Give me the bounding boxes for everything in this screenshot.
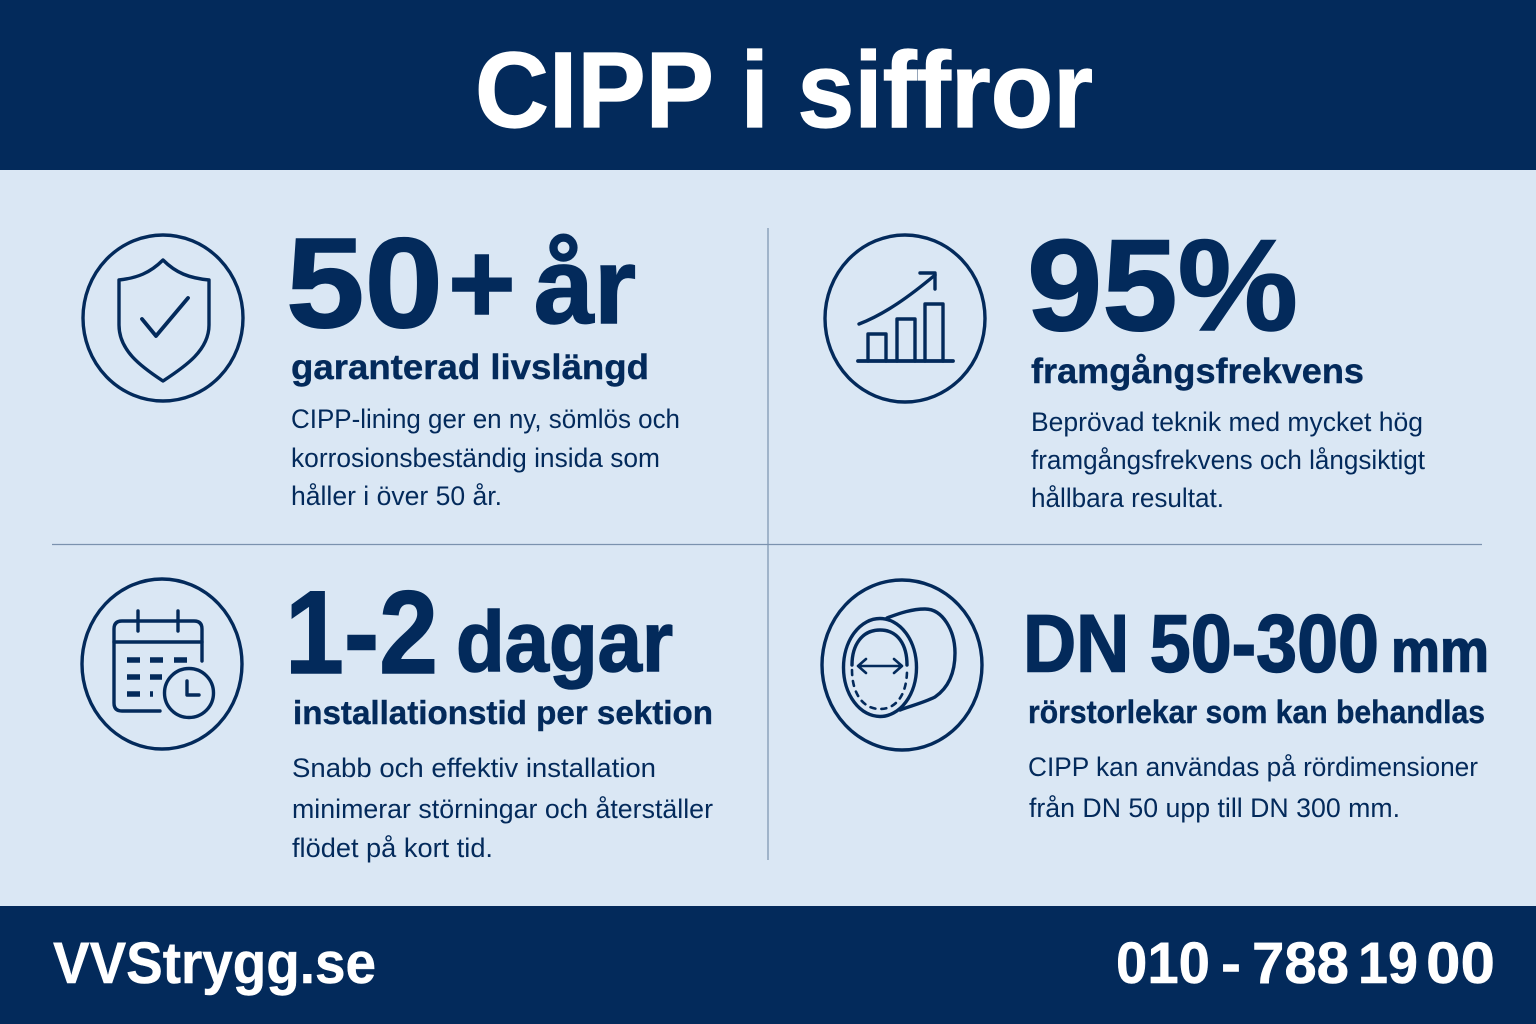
description bbox=[291, 404, 680, 511]
stat: 50+ år: + bbox=[448, 218, 516, 348]
phone number bbox=[1116, 931, 1495, 996]
website: VVStrygg.se bbox=[53, 931, 376, 996]
panel: success rate bbox=[825, 212, 1425, 513]
description: Snabb och effektiv installation bbox=[292, 753, 656, 783]
stat: DN 50-300 mm: DN 50-300 bbox=[1023, 598, 1379, 690]
description: korrosionsbeständig insida som bbox=[291, 443, 660, 473]
stat: 1-2 dagar bbox=[285, 567, 673, 699]
stat: 1-2 dagar: dagar bbox=[456, 595, 673, 690]
stat: 50+ år: 50 bbox=[286, 212, 443, 355]
stat: 50+ år bbox=[286, 212, 636, 355]
description: från DN 50 upp till DN 300 mm. bbox=[1029, 793, 1400, 823]
phone number: - bbox=[1221, 931, 1241, 996]
icon: growth chart bbox=[825, 235, 985, 402]
description: flödet på kort tid. bbox=[292, 833, 493, 863]
description: CIPP kan användas på rördimensioner bbox=[1028, 752, 1478, 782]
subheading: rörstorlekar som kan behandlas bbox=[1028, 694, 1485, 730]
subheading: installationstid per sektion bbox=[293, 694, 713, 731]
description bbox=[292, 753, 713, 863]
header band bbox=[0, 0, 1536, 170]
icon: calendar with clock bbox=[82, 579, 242, 749]
description: hållbara resultat. bbox=[1031, 483, 1224, 513]
stat: 1-2 dagar: 1-2 bbox=[285, 567, 438, 699]
subheading: garanterad livslängd bbox=[291, 348, 649, 387]
phone number: 19 bbox=[1358, 931, 1418, 996]
phone number: 788 bbox=[1252, 931, 1349, 996]
description: framgångsfrekvens och långsiktigt bbox=[1031, 445, 1425, 475]
title: CIPP i siffror bbox=[475, 29, 1093, 150]
panel: pipe sizes bbox=[822, 580, 1489, 823]
description: minimerar störningar och återställer bbox=[292, 794, 713, 824]
phone number: 00 bbox=[1426, 931, 1495, 996]
description: Beprövad teknik med mycket hög bbox=[1031, 407, 1423, 437]
description bbox=[1028, 752, 1478, 823]
description bbox=[1031, 407, 1425, 513]
panel: installation time bbox=[82, 567, 713, 863]
panel: lifespan bbox=[83, 212, 680, 511]
subheading: framgångsfrekvens bbox=[1031, 352, 1364, 391]
stat: 95%: 95% bbox=[1027, 212, 1298, 358]
footer band bbox=[0, 906, 1536, 1024]
description: CIPP-lining ger en ny, sömlös och bbox=[291, 404, 680, 434]
stat: 50+ år: år bbox=[534, 225, 636, 346]
phone number: 010 bbox=[1116, 931, 1210, 996]
stat: DN 50-300 mm: mm bbox=[1391, 618, 1489, 684]
icon: shield with check bbox=[83, 235, 243, 401]
description: håller i över 50 år. bbox=[291, 481, 502, 511]
icon: pipe cross-section bbox=[822, 580, 982, 750]
